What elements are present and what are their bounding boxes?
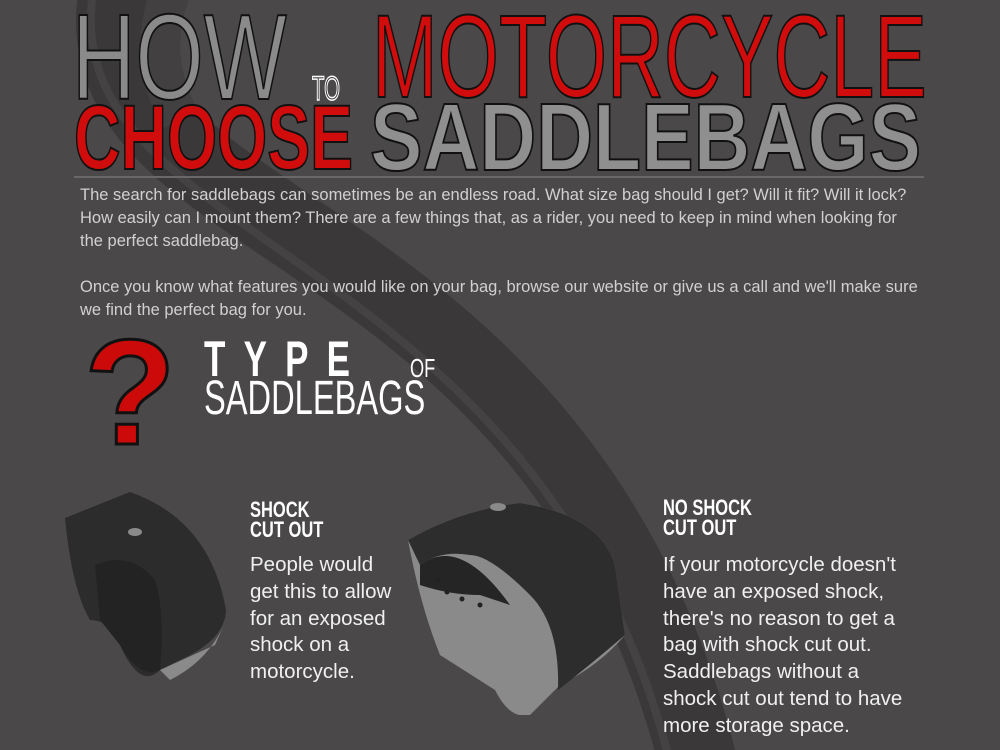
section heading: SADDLEBAGS [204, 372, 425, 425]
text: no shock cut out: CUT OUT [663, 515, 736, 540]
section heading: OF [410, 353, 435, 383]
intro text [80, 186, 906, 250]
text: no shock cut out: If your motorcycle doesn't [663, 553, 896, 576]
text: shock cut out: shock on a [250, 633, 349, 656]
text: no shock cut out: NO SHOCK [663, 495, 752, 520]
intro text: The search for saddlebags can sometimes be an endless road. What size bag should I get? Will it fit? Will it lock? [80, 186, 906, 204]
text: shock cut out: for an exposed [250, 607, 386, 630]
text: shock cut out: People would [250, 553, 373, 576]
intro text 2 [80, 278, 918, 319]
text: no shock cut out [663, 495, 902, 737]
text: shock cut out: motorcycle. [250, 660, 355, 683]
intro text: the perfect saddlebag. [80, 232, 243, 250]
section heading [204, 331, 435, 425]
title: CHOOSE [74, 87, 353, 189]
text: no shock cut out: bag with shock cut out. [663, 633, 872, 656]
intro text: How easily can I mount them? There are a few things that, as a rider, you need to keep in mind when looking for [80, 209, 897, 227]
title [72, 0, 927, 191]
title: SADDLEBAGS [370, 84, 921, 191]
icon: no shock cut out bag [408, 503, 625, 715]
text: shock cut out: SHOCK [250, 497, 310, 522]
text: no shock cut out: shock cut out tend to have [663, 687, 902, 710]
intro text 2: Once you know what features you would like on your bag, browse our website or give us a call and we'll make sure [80, 278, 918, 296]
text: no shock cut out: more storage space. [663, 714, 850, 737]
text: no shock cut out: Saddlebags without a [663, 660, 859, 683]
title: TO [312, 70, 340, 108]
section heading: TYPE [204, 331, 368, 387]
text: no shock cut out: there's no reason to get a [663, 607, 895, 630]
text: shock cut out [250, 497, 392, 683]
icon: shock cut out bag [65, 492, 226, 680]
text: shock cut out: get this to allow [250, 580, 391, 603]
text: no shock cut out: have an exposed shock, [663, 580, 884, 603]
intro text 2: we find the perfect bag for you. [80, 301, 307, 319]
text: shock cut out: CUT OUT [250, 517, 323, 542]
